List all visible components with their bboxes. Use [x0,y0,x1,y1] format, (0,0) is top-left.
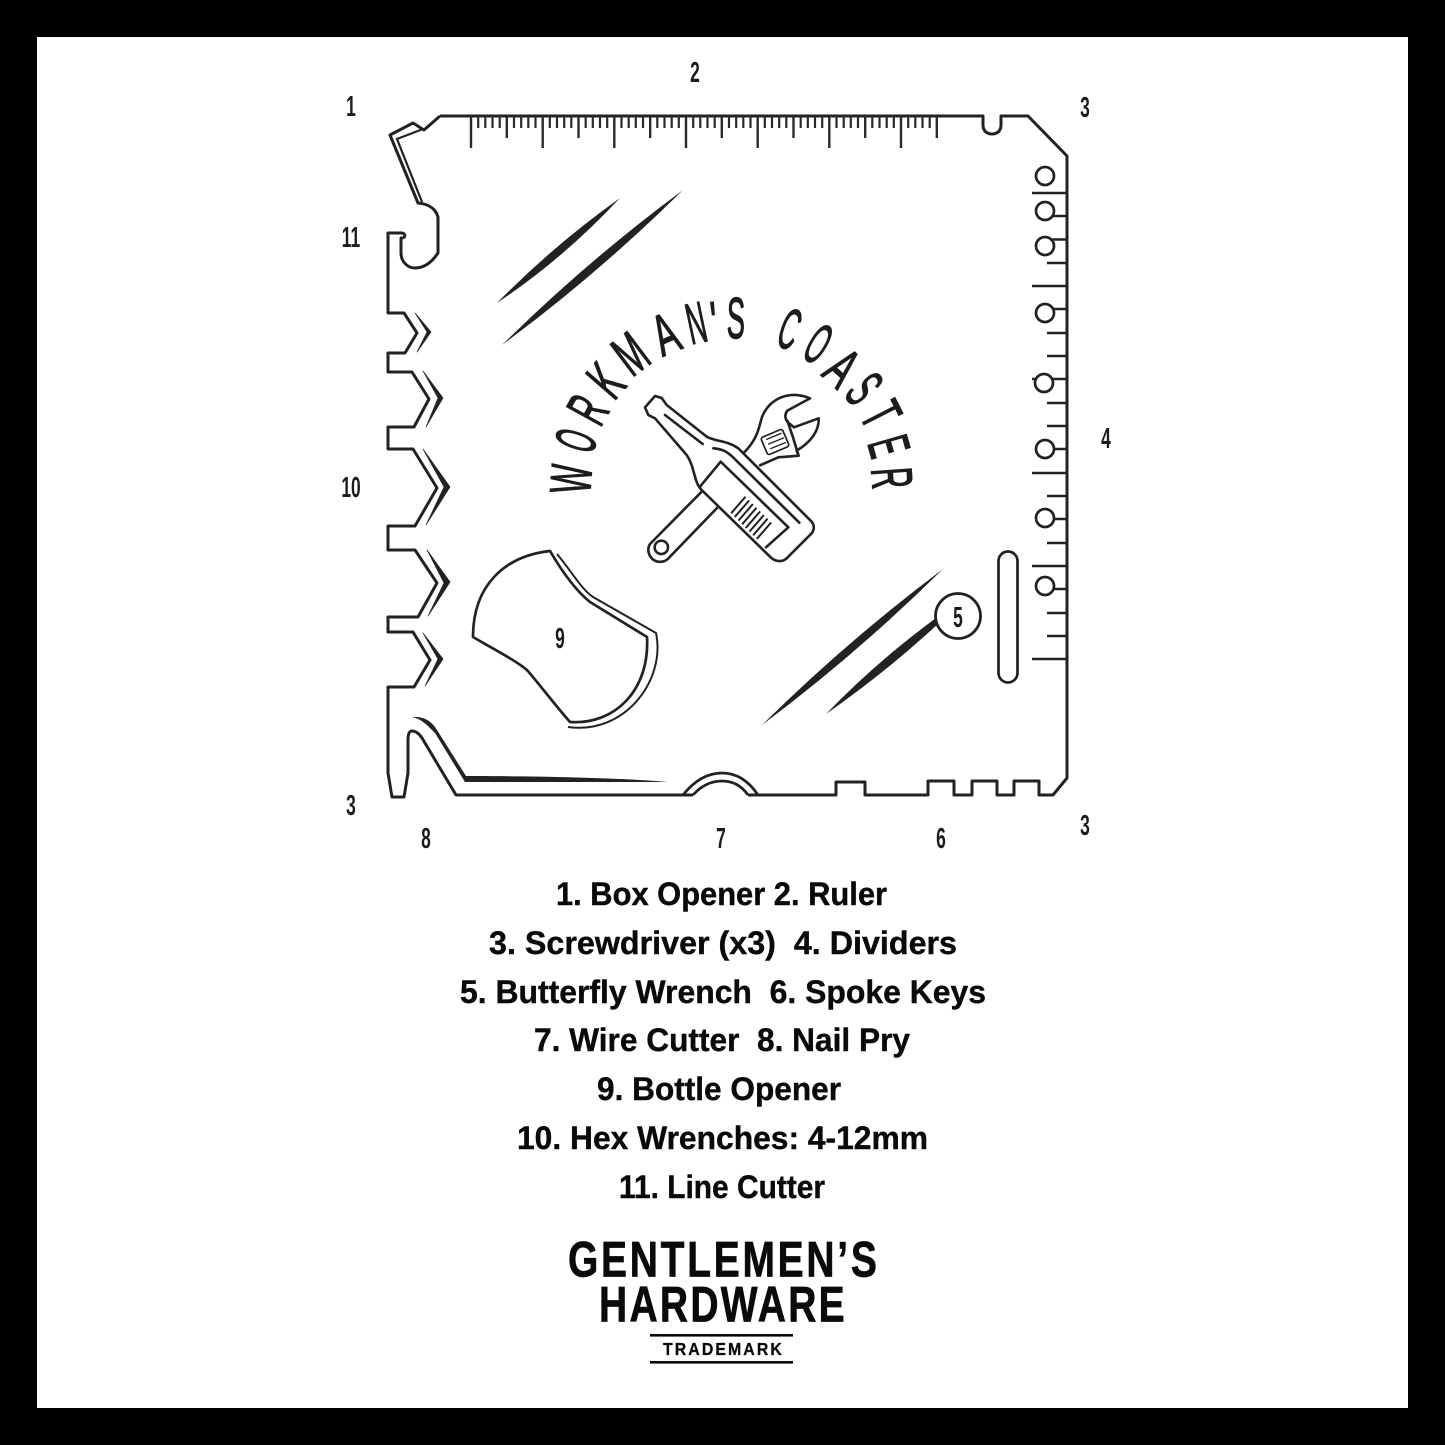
title: curved workman's coaster lettering: C [770,296,809,363]
title: curved workman's coaster lettering: S [833,361,895,416]
title: curved workman's coaster lettering: O [544,422,610,460]
icon: hex wrench chevrons [415,313,450,686]
icon: wrench [648,395,819,562]
icon: bottle [645,396,814,561]
tool list text: 5. Butterfly Wrench 6. Spoke Keys [460,974,986,1010]
tool list text: 7. Wire Cutter 8. Nail Pry [534,1022,910,1058]
tool list text [460,876,986,1205]
title: curved workman's coaster lettering: ' [708,291,721,355]
numbered callouts [341,57,1111,855]
numbered callouts: 4 [1101,423,1111,455]
title: curved workman's coaster lettering: N [680,289,712,357]
icon: diagonal blades [497,190,943,725]
tool list text: 9. Bottle Opener [597,1071,841,1107]
tool list text: 1. Box Opener 2. Ruler [556,876,887,912]
title: curved workman's coaster lettering: R [859,465,926,491]
title: curved workman's coaster lettering: A [811,337,872,400]
tool list text: 3. Screwdriver (x3) 4. Dividers [489,925,957,961]
numbered callouts: 6 [936,823,946,855]
brand logo: gentlemen's hardware trademark: TRADEMARK [663,1339,783,1359]
title: curved workman's coaster lettering: A [643,301,689,369]
tool card diagram [341,57,1111,855]
numbered callouts: 1 [346,91,356,123]
tool list text: 10. Hex Wrenches: 4-12mm [517,1120,928,1156]
numbered callouts: 5 [953,602,963,634]
title: curved workman's coaster lettering: S [726,285,746,351]
numbered callouts: 8 [421,823,431,855]
card outline [388,116,1067,797]
numbered callouts: 9 [555,623,565,655]
numbered callouts: 3 [346,790,356,822]
numbered callouts: 7 [716,823,726,855]
numbered callouts: 10 [341,472,361,504]
brand logo: gentlemen's hardware trademark: HARDWARE [599,1276,845,1333]
icon: box opener blade [397,129,423,202]
numbered callouts: 3 [1080,92,1090,124]
numbered callouts: 11 [342,222,360,254]
icon: long slot [998,552,1018,682]
title: curved workman's coaster lettering [537,285,926,496]
tool list text: 11. Line Cutter [619,1169,825,1205]
icon: bottle opener [473,551,658,728]
title: curved workman's coaster lettering: T [848,391,914,438]
numbered callouts: 3 [1080,810,1090,842]
title: curved workman's coaster lettering: E [855,429,923,464]
dividers ticks and holes [1032,167,1067,659]
icon: nail pry highlight [412,717,668,782]
title: curved workman's coaster lettering: O [793,313,842,377]
icon: wire cutter [683,773,758,795]
logo: crossed bottle and wrench [645,395,819,562]
title: curved workman's coaster lettering: M [600,319,661,388]
icon: butterfly wrench circle [936,594,980,638]
numbered callouts: 2 [690,57,700,89]
title: curved workman's coaster lettering: R [554,384,622,434]
title: curved workman's coaster lettering: K [575,352,637,410]
ruler ticks [471,116,937,148]
brand logo: gentlemen's hardware trademark [568,1231,877,1364]
brand logo: gentlemen's hardware trademark: GENTLEMEN’S [568,1231,877,1288]
title: curved workman's coaster lettering: W [537,462,604,496]
